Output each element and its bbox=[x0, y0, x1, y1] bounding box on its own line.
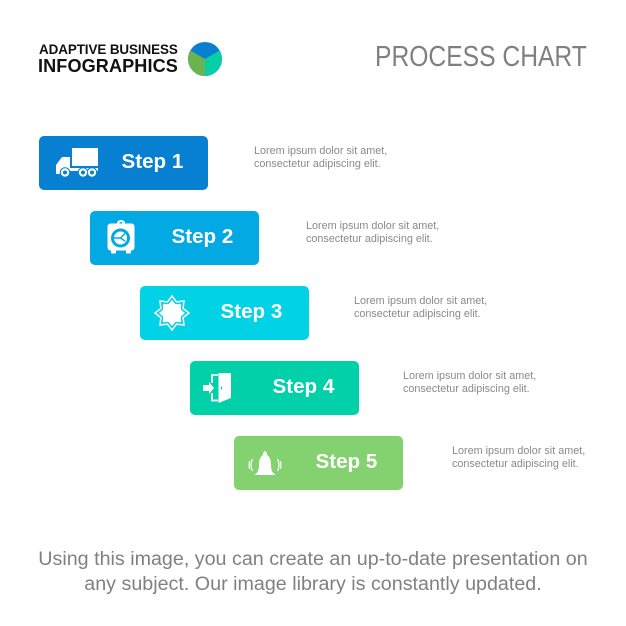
step 1 text bbox=[254, 145, 387, 170]
title: PROCESS CHART bbox=[375, 41, 587, 73]
footer text: Using this image, you can create an up-to-date presentation on bbox=[38, 548, 588, 570]
icon: burst star bbox=[154, 294, 190, 332]
logo bbox=[38, 41, 222, 76]
step 4 label: Step 4 bbox=[272, 375, 334, 398]
logo text line 1: ADAPTIVE BUSINESS bbox=[39, 41, 178, 57]
step 1 bar bbox=[39, 136, 208, 190]
step 3 text: Lorem ipsum dolor sit amet, bbox=[354, 295, 487, 307]
step 5 text: Lorem ipsum dolor sit amet, bbox=[452, 445, 585, 457]
step 2 text bbox=[306, 220, 439, 245]
step 1 text: consectetur adipiscing elit. bbox=[254, 158, 381, 170]
step 2 label: Step 2 bbox=[172, 225, 233, 248]
icon: safe clock bbox=[108, 220, 134, 254]
step 3 text bbox=[354, 295, 487, 320]
step 1 label: Step 1 bbox=[122, 150, 183, 173]
step 3 bar bbox=[140, 286, 309, 340]
step 2 text: consectetur adipiscing elit. bbox=[306, 233, 433, 245]
step 5 bar bbox=[234, 436, 403, 490]
step 3 text: consectetur adipiscing elit. bbox=[354, 308, 481, 320]
step 1 text: Lorem ipsum dolor sit amet, bbox=[254, 145, 387, 157]
footer text: any subject. Our image library is constantly updated. bbox=[84, 573, 542, 595]
footer text bbox=[38, 548, 588, 595]
logo pie icon bbox=[188, 42, 222, 76]
icon: truck bbox=[56, 148, 98, 177]
step 4 text: Lorem ipsum dolor sit amet, bbox=[403, 370, 536, 382]
step 5 label: Step 5 bbox=[316, 450, 377, 473]
step 4 bar bbox=[190, 361, 359, 414]
step 3 label: Step 3 bbox=[220, 300, 282, 323]
icon: bell bbox=[248, 451, 282, 475]
step 4 text: consectetur adipiscing elit. bbox=[403, 383, 530, 395]
step 5 text bbox=[452, 445, 585, 470]
step 4 text bbox=[403, 370, 536, 395]
step 2 bar bbox=[90, 211, 259, 264]
step 5 text: consectetur adipiscing elit. bbox=[452, 458, 579, 470]
step 2 text: Lorem ipsum dolor sit amet, bbox=[306, 220, 439, 232]
logo text line 2: INFOGRAPHICS bbox=[38, 56, 178, 76]
icon: door bbox=[203, 373, 231, 403]
